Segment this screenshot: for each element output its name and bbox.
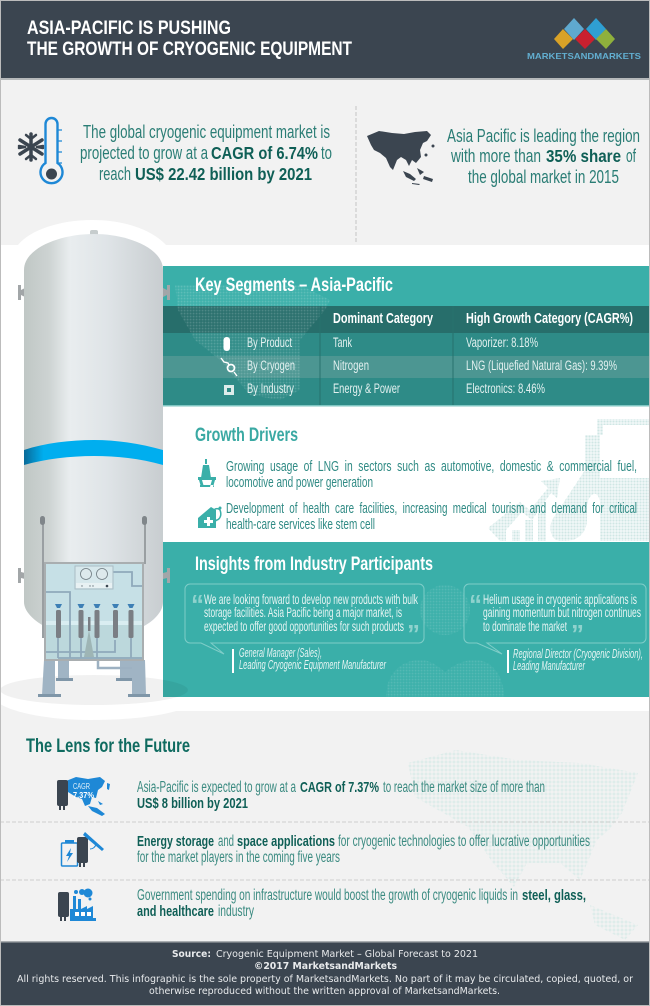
attribution: general manager: General Manager (Sales), bbox=[239, 646, 322, 660]
text: Asia-Pacific outlook: CAGR of 7.37% bbox=[300, 779, 379, 796]
text: global market stat: projected to grow at a bbox=[80, 143, 209, 163]
logo: MarketsandMarkets: MARKETSANDMARKETS bbox=[527, 51, 641, 61]
table header: Dominant Category bbox=[333, 310, 433, 327]
text: energy storage and space: and bbox=[218, 833, 234, 850]
source line: Cryogenic Equipment Market – Global Forecast to 2021 bbox=[216, 949, 478, 960]
control cabinet bbox=[45, 563, 143, 660]
text: government spending: steel, glass, bbox=[522, 887, 586, 904]
side nozzles bbox=[18, 285, 170, 583]
quote bubble: general manager: We are looking forward to develop new products with bulk bbox=[204, 592, 418, 607]
text: government spending bbox=[137, 887, 586, 920]
header bar bbox=[0, 0, 650, 80]
title: THE GROWTH OF CRYOGENIC EQUIPMENT bbox=[27, 38, 352, 60]
table row: by product: Tank bbox=[333, 335, 352, 350]
panel: insights from industry participants bbox=[163, 542, 650, 697]
text: energy storage and space: space applications bbox=[237, 833, 335, 850]
quote bubble: regional director: “ bbox=[469, 589, 482, 619]
footer bbox=[0, 941, 650, 1006]
text: global market stat: The global cryogenic equipment market is bbox=[83, 122, 330, 142]
quote bubble: general manager: expected to offer good opportunities for such products bbox=[204, 619, 404, 634]
attribution: general manager bbox=[232, 646, 386, 673]
table row: by industry: By Industry bbox=[247, 381, 294, 396]
icon: thermometer and snowflake bbox=[19, 118, 62, 183]
source line: Source: bbox=[172, 949, 211, 960]
icon: Asia map bbox=[367, 131, 434, 185]
table row: by industry: Energy & Power bbox=[333, 381, 400, 396]
text: global market stat: CAGR of 6.74% bbox=[211, 143, 318, 163]
text: Asia-Pacific outlook bbox=[137, 779, 545, 812]
text: global market stat: US$ 22.42 billion by 2021 bbox=[135, 164, 312, 184]
front legs bbox=[38, 660, 150, 697]
text: LNG driver bbox=[226, 458, 637, 491]
quote bubble: general manager: ” bbox=[407, 619, 420, 649]
table row: by industry bbox=[224, 381, 545, 396]
panel: key segments bbox=[163, 266, 650, 406]
valve cylinders bbox=[55, 604, 134, 638]
heading: key segments: Key Segments – Asia-Pacific bbox=[195, 274, 393, 296]
support rods bbox=[40, 516, 147, 638]
background: dotted fuel pump and growth arrow bbox=[488, 419, 650, 541]
table row: by product bbox=[224, 335, 538, 351]
title bbox=[27, 17, 352, 60]
icon: Asia CAGR map with tank: 7.37% bbox=[73, 790, 94, 800]
attribution: general manager: Leading Cryogenic Equipment Manufacturer bbox=[239, 658, 386, 672]
tank body bbox=[24, 234, 163, 626]
text: Asia Pacific share stat: 35% share bbox=[546, 146, 621, 166]
text: global market stat bbox=[80, 122, 332, 184]
table row: by cryogen bbox=[221, 358, 617, 376]
table row: by product: By Product bbox=[247, 335, 292, 350]
quote bubble: general manager: “ bbox=[191, 589, 204, 619]
title: ASIA-PACIFIC IS PUSHING bbox=[27, 17, 231, 39]
icon: health care bbox=[198, 506, 222, 528]
text: health care driver bbox=[226, 500, 637, 533]
heading: the lens for the future: The Lens for the Future bbox=[26, 735, 190, 757]
stat divider bbox=[355, 106, 357, 242]
attribution: regional director bbox=[507, 647, 643, 673]
attribution: regional director: Leading Manufacturer bbox=[513, 659, 585, 673]
text: global market stat: to bbox=[321, 143, 332, 163]
text: energy storage and space: Energy storage bbox=[137, 833, 214, 850]
text: government spending: industry bbox=[218, 903, 254, 920]
table header bbox=[333, 310, 633, 327]
section: growth drivers bbox=[195, 424, 637, 533]
table row: by cryogen: Nitrogen bbox=[333, 358, 369, 373]
quote bubble: general manager bbox=[185, 584, 424, 654]
text: energy storage and space bbox=[137, 833, 590, 866]
text: Asia Pacific share stat: of bbox=[626, 146, 637, 166]
text: Asia-Pacific outlook: Asia-Pacific is expected to grow at a bbox=[137, 779, 296, 796]
text: Asia Pacific share stat: with more than bbox=[450, 146, 541, 166]
text: Asia-Pacific outlook: to reach the market size of more than bbox=[383, 779, 545, 796]
text: energy storage and space: for the market players in the coming five years bbox=[137, 849, 340, 866]
rights text: otherwise reproduced without the written approval of MarketsandMarkets. bbox=[149, 986, 500, 997]
quote bubble: general manager: storage facilities. Asia Pacific being a major market, is bbox=[204, 605, 402, 620]
gauges panel bbox=[75, 566, 113, 589]
quote bubble: regional director: ” bbox=[571, 619, 584, 649]
shadow under tank bbox=[0, 675, 188, 705]
quote bubble: regional director bbox=[464, 584, 646, 654]
table row: by cryogen: By Cryogen bbox=[247, 358, 295, 373]
heading: insights: Insights from Industry Participants bbox=[195, 553, 433, 575]
text: Asia Pacific share stat bbox=[447, 126, 640, 187]
illustration: cryogenic tank bbox=[18, 230, 170, 697]
blue band bbox=[24, 440, 163, 465]
rights text bbox=[17, 974, 634, 997]
heading: growth drivers: Growth Drivers bbox=[195, 424, 298, 446]
white middle section bbox=[0, 220, 650, 720]
text: Asia-Pacific outlook: US$ 8 billion by 2021 bbox=[137, 795, 248, 812]
text: global market stat: reach bbox=[99, 164, 131, 184]
icon: Asia CAGR map with tank: CAGR bbox=[73, 782, 90, 791]
text: government spending: and healthcare bbox=[137, 903, 214, 920]
back legs bbox=[56, 660, 133, 681]
icon: oil rig bbox=[198, 459, 216, 487]
icon: battery, tank and satellite bbox=[62, 832, 104, 867]
rights text: All rights reserved. This infographic is the sole property of MarketsandMarkets. No part of it may be circulated, copied, quoted, or bbox=[17, 974, 634, 985]
table row: by product: Vaporizer: 8.18% bbox=[466, 335, 538, 350]
text: LNG driver: locomotive and power generation bbox=[226, 474, 373, 491]
quote bubble: regional director: to dominate the market bbox=[483, 619, 567, 634]
text: health care driver: health-care services like stem cell bbox=[226, 516, 375, 533]
logo: MarketsandMarkets bbox=[527, 18, 641, 61]
icon: Asia CAGR map with tank bbox=[57, 777, 110, 816]
copyright line: ©2017 MarketsandMarkets bbox=[254, 961, 397, 972]
background: dotted Asia map bbox=[408, 750, 638, 940]
icon: factory and tank bbox=[58, 888, 96, 921]
section: the lens for the future bbox=[0, 735, 650, 921]
table row: by industry: Electronics: 8.46% bbox=[466, 381, 545, 396]
